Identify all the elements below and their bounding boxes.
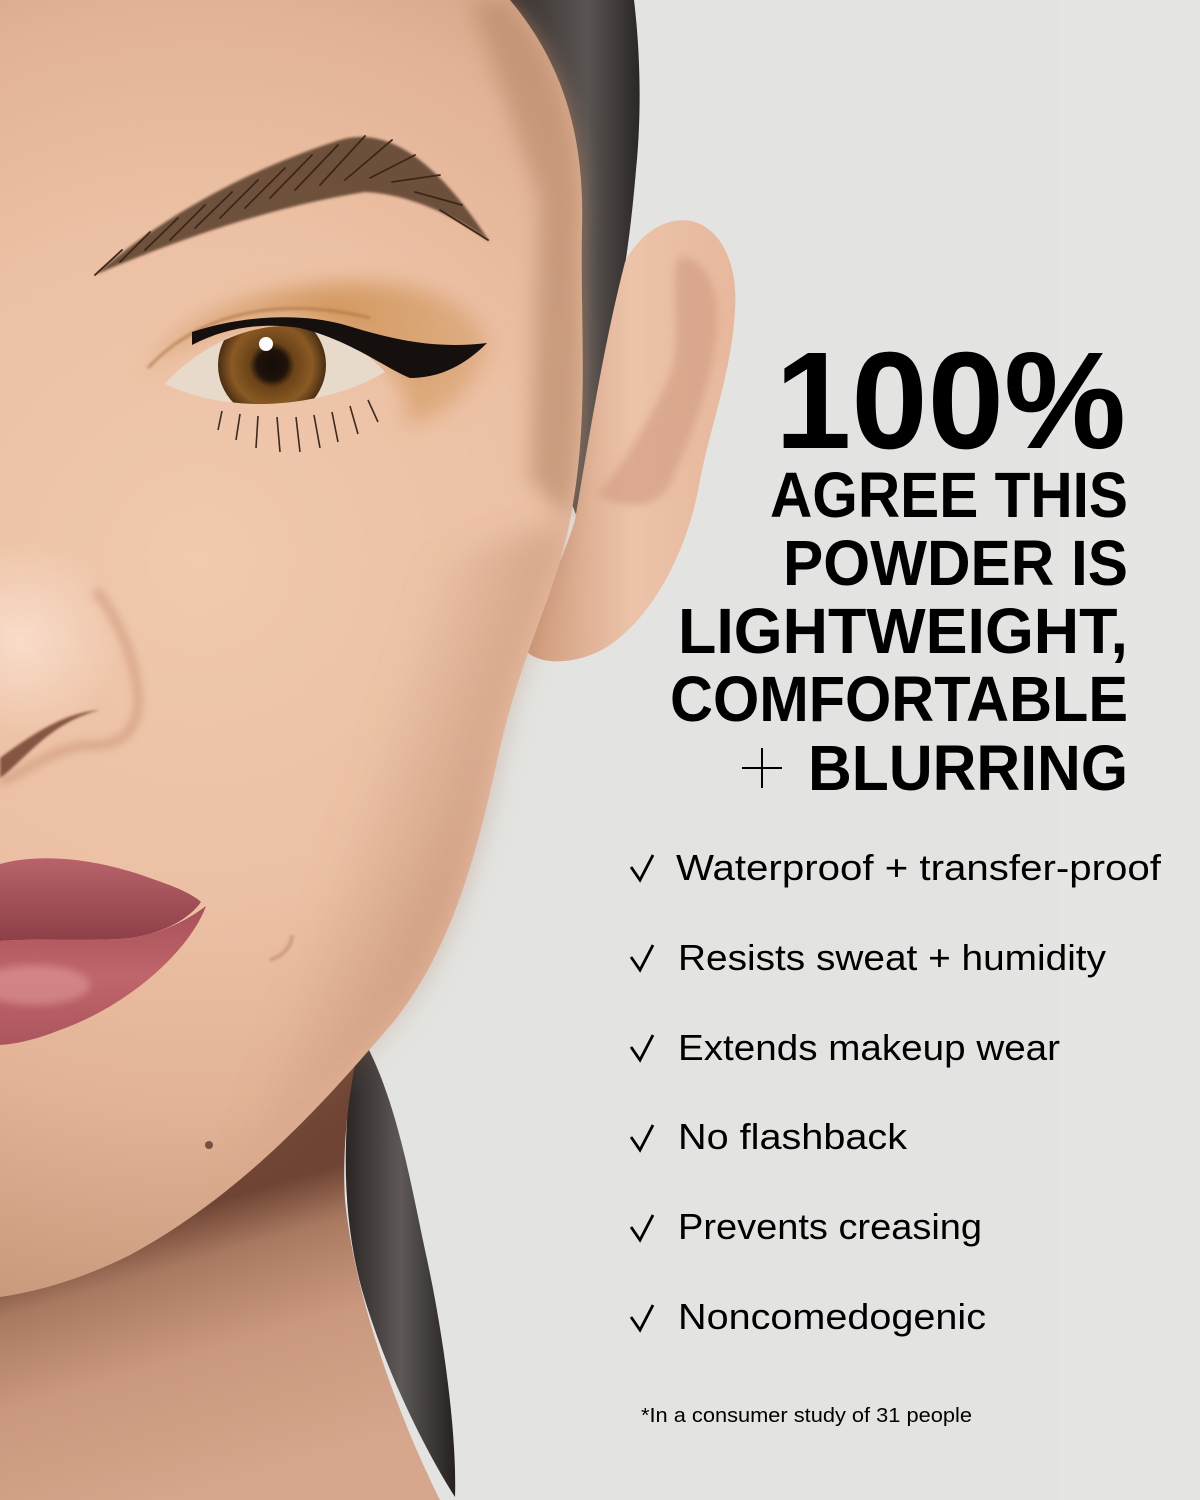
nostril	[0, 710, 100, 778]
lower lashes	[218, 400, 378, 452]
lower lip	[0, 906, 206, 1045]
eye white	[165, 326, 385, 404]
face skin	[0, 0, 583, 1297]
catchlight	[259, 337, 273, 351]
nose highlight	[0, 540, 120, 740]
eyebrow	[95, 136, 490, 275]
iris	[218, 326, 326, 404]
upper lip	[0, 858, 201, 941]
lips	[0, 858, 206, 1045]
eyebrow body	[95, 137, 490, 275]
lid crease	[148, 308, 370, 368]
footnote: *In a consumer study of 31 people	[641, 1405, 972, 1427]
item: wear: Extends makeup wear	[678, 1027, 1060, 1068]
item: creasing: Prevents creasing	[678, 1206, 982, 1247]
photo: model's half face	[0, 0, 735, 1500]
eyeshadow	[135, 282, 490, 425]
stat: 100%	[775, 324, 1126, 478]
ear	[527, 220, 735, 661]
ear inner folds	[597, 257, 718, 505]
hair: top of head	[490, 0, 640, 520]
nose contour	[0, 590, 138, 782]
neck	[0, 1060, 440, 1500]
skin shading near jaw	[130, 520, 570, 1255]
item: noncomedogenic: Noncomedogenic	[678, 1296, 986, 1337]
heading line: LIGHTWEIGHT,	[678, 595, 1128, 667]
hair: ponytail	[346, 1030, 455, 1497]
item: flashback: No flashback	[678, 1116, 908, 1157]
heading line: COMFORTABLE	[670, 663, 1128, 735]
eyebrow hairs	[95, 136, 488, 275]
mole	[205, 1141, 213, 1149]
background lighter strip	[1060, 0, 1200, 1500]
heading block	[670, 324, 1128, 804]
plus sign	[742, 748, 782, 788]
checklist	[631, 847, 1162, 1337]
item: sweat: Resists sweat + humidity	[678, 937, 1106, 978]
cheek mark	[270, 935, 292, 960]
heading line: BLURRING	[808, 732, 1128, 804]
lip gloss	[0, 965, 90, 1005]
eyeliner	[192, 317, 487, 378]
heading line: AGREE THIS	[770, 459, 1128, 531]
item: waterproof: Waterproof + transfer-proof	[676, 847, 1162, 888]
skin shading at the hairline	[470, 0, 583, 520]
heading line: POWDER IS	[783, 527, 1128, 599]
